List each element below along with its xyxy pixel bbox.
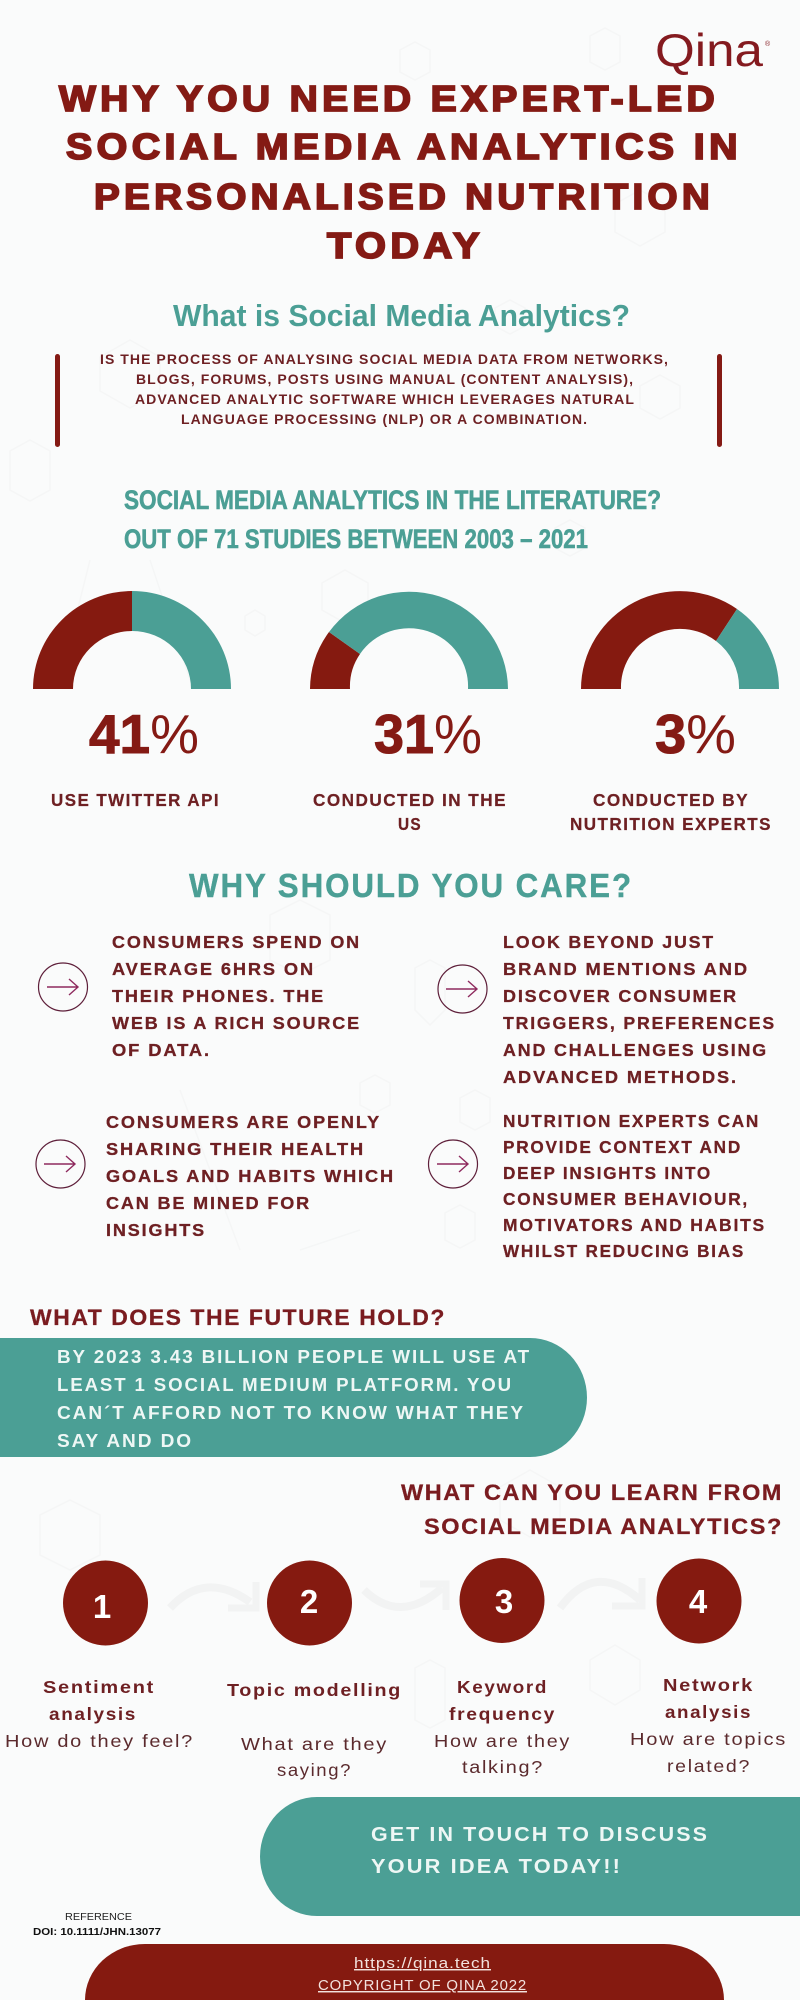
- stat: 31% conducted in the us: [310, 592, 508, 834]
- network analysis text: Network: [663, 1675, 754, 1695]
- icon: arrow circle: [38, 963, 88, 1011]
- logo: Qina: ®: [765, 40, 771, 48]
- number badge 4: 4: [689, 1583, 708, 1620]
- heading: what does the future hold: WHAT DOES THE FUTURE HOLD?: [30, 1305, 446, 1330]
- icon: arrow circle: [36, 1140, 85, 1188]
- value 3%: 3%: [655, 703, 736, 765]
- text: [112, 932, 361, 1060]
- step 4: [630, 1558, 787, 1776]
- value 31%: 31%: [374, 703, 482, 765]
- network analysis text: How are topics: [630, 1729, 787, 1749]
- text: WHILST REDUCING BIAS: [503, 1241, 745, 1261]
- callout text: CAN´T AFFORD NOT TO KNOW WHAT THEY: [57, 1403, 525, 1423]
- text: LOOK BEYOND JUST: [503, 932, 715, 952]
- sentiment analysis text: How do they feel?: [5, 1731, 194, 1751]
- reason 3: [36, 1112, 395, 1240]
- keyword frequency text: Keyword: [457, 1677, 548, 1697]
- callout text: BY 2023 3.43 BILLION PEOPLE WILL USE AT: [57, 1347, 531, 1367]
- text: TRIGGERS, PREFERENCES: [503, 1013, 776, 1033]
- call to action text: YOUR IDEA TODAY!!: [371, 1855, 622, 1878]
- text: SHARING THEIR HEALTH: [106, 1139, 365, 1159]
- topic modelling text: saying?: [277, 1760, 352, 1780]
- footer text: COPYRIGHT OF QINA 2022: [318, 1978, 527, 1994]
- definition text: LANGUAGE PROCESSING (NLP) OR A COMBINATION.: [181, 412, 588, 427]
- heading: why should you care: WHY SHOULD YOU CARE?: [189, 867, 633, 904]
- text: ADVANCED METHODS.: [503, 1067, 738, 1087]
- text: BRAND MENTIONS AND: [503, 959, 749, 979]
- number badge 2: 2: [300, 1583, 318, 1620]
- gauge 41%: [33, 591, 231, 689]
- label: conducted in the us: US: [398, 814, 422, 834]
- text: INSIGHTS: [106, 1220, 206, 1240]
- number badge 4: [656, 1558, 742, 1644]
- text: CAN BE MINED FOR: [106, 1193, 311, 1213]
- arrow: step 1 to 2: [170, 1582, 256, 1608]
- text: THEIR PHONES. THE: [112, 986, 325, 1006]
- text: MOTIVATORS AND HABITS: [503, 1215, 766, 1235]
- text: PROVIDE CONTEXT AND: [503, 1137, 742, 1157]
- text: OF DATA.: [112, 1040, 211, 1060]
- callout: future: [0, 1338, 587, 1457]
- label: use twitter api: USE TWITTER API: [51, 790, 220, 810]
- text: DEEP INSIGHTS INTO: [503, 1163, 712, 1183]
- reference: REFERENCE: [65, 1912, 132, 1923]
- heading: literature: OUT OF 71 STUDIES BETWEEN 2003 – 2021: [124, 524, 588, 554]
- text: [106, 1112, 395, 1240]
- value 41%: 41%: [89, 703, 199, 765]
- arrow: step 3 to 4: [560, 1578, 642, 1608]
- topic modelling text: What are they: [241, 1734, 388, 1754]
- heading: literature: SOCIAL MEDIA ANALYTICS IN THE LITERATURE?: [124, 485, 661, 515]
- heading: what can you learn: SOCIAL MEDIA ANALYTICS?: [424, 1514, 783, 1539]
- reason 2: [438, 932, 776, 1087]
- definition text: BLOGS, FORUMS, POSTS USING MANUAL (CONTENT ANALYSIS),: [136, 372, 634, 387]
- heading: literature: [124, 485, 661, 554]
- footer text: [318, 1956, 527, 1994]
- heading: what is social media analytics: What is Social Media Analytics?: [173, 298, 630, 333]
- step 1: [5, 1560, 194, 1751]
- callout text: SAY AND DO: [57, 1431, 193, 1451]
- title: SOCIAL MEDIA ANALYTICS IN: [66, 126, 742, 167]
- text: [503, 932, 776, 1087]
- number badge 3: 3: [495, 1583, 513, 1620]
- text: CONSUMER BEHAVIOUR,: [503, 1189, 749, 1209]
- title: [59, 78, 742, 266]
- topic modelling text: [227, 1680, 402, 1780]
- sentiment analysis text: [5, 1677, 194, 1751]
- call to action text: [371, 1823, 709, 1878]
- text: NUTRITION EXPERTS CAN: [503, 1111, 760, 1131]
- text: AVERAGE 6HRS ON: [112, 959, 315, 979]
- text: AND CHALLENGES USING: [503, 1040, 768, 1060]
- gauge 31%: [310, 592, 508, 689]
- title: WHY YOU NEED EXPERT-LED: [59, 78, 719, 119]
- arrow: step 2 to 3: [364, 1584, 446, 1610]
- keyword frequency text: How are they: [434, 1731, 571, 1751]
- text: GOALS AND HABITS WHICH: [106, 1166, 395, 1186]
- reason 1: [38, 932, 361, 1060]
- heading: what can you learn: WHAT CAN YOU LEARN FROM: [401, 1480, 783, 1505]
- text: [503, 1111, 766, 1261]
- sentiment analysis text: Sentiment: [43, 1677, 155, 1697]
- definition text: IS THE PROCESS OF ANALYSING SOCIAL MEDIA DATA FROM NETWORKS,: [100, 352, 669, 367]
- network analysis text: [630, 1675, 787, 1776]
- text: WEB IS A RICH SOURCE: [112, 1013, 361, 1033]
- definition panel: [55, 352, 722, 447]
- title: PERSONALISED NUTRITION: [94, 176, 714, 217]
- footer text: https://qina.tech: [354, 1956, 491, 1972]
- text: CONSUMERS ARE OPENLY: [106, 1112, 381, 1132]
- reference: [33, 1912, 162, 1938]
- stat: 3% conducted by nutrition experts: [570, 591, 779, 834]
- reference: DOI: 10.1111/JHN.13077: [33, 1927, 162, 1938]
- keyword frequency text: frequency: [449, 1704, 556, 1724]
- topic modelling text: Topic modelling: [227, 1680, 402, 1700]
- text: DISCOVER CONSUMER: [503, 986, 738, 1006]
- label: conducted by nutrition experts: CONDUCTED BY: [593, 790, 749, 810]
- label: conducted in the us: CONDUCTED IN THE: [313, 790, 507, 810]
- stat: 41% use twitter api: [33, 591, 231, 810]
- heading: what can you learn: [401, 1480, 783, 1539]
- label: conducted by nutrition experts: [570, 790, 772, 834]
- number badge 1: [63, 1560, 148, 1646]
- number badge 3: [460, 1558, 544, 1643]
- number badge 2: [267, 1560, 352, 1646]
- icon: arrow circle: [428, 1140, 478, 1188]
- definition text: [100, 352, 669, 427]
- step 2: [227, 1560, 402, 1780]
- title: TODAY: [327, 225, 484, 266]
- call to action text: GET IN TOUCH TO DISCUSS: [371, 1823, 709, 1846]
- label: conducted in the us: [313, 790, 507, 834]
- text: CONSUMERS SPEND ON: [112, 932, 361, 952]
- footer: [85, 1944, 724, 2000]
- sentiment analysis text: analysis: [49, 1704, 137, 1724]
- keyword frequency text: talking?: [462, 1757, 544, 1777]
- icon: arrow circle: [438, 965, 487, 1013]
- keyword frequency text: [434, 1677, 571, 1777]
- call to action: [260, 1797, 800, 1916]
- number badge 1: 1: [93, 1588, 111, 1625]
- network analysis text: analysis: [665, 1702, 752, 1722]
- gauge 3%: [581, 591, 779, 689]
- definition text: ADVANCED ANALYTIC SOFTWARE WHICH LEVERAGES NATURAL: [135, 392, 635, 407]
- callout text: [57, 1347, 531, 1451]
- logo: Qina: Qina: [655, 24, 763, 76]
- callout text: LEAST 1 SOCIAL MEDIUM PLATFORM. YOU: [57, 1375, 513, 1395]
- network analysis text: related?: [667, 1756, 751, 1776]
- step 3: [434, 1558, 571, 1777]
- reason 4: [428, 1111, 766, 1261]
- label: conducted by nutrition experts: NUTRITION EXPERTS: [570, 814, 772, 834]
